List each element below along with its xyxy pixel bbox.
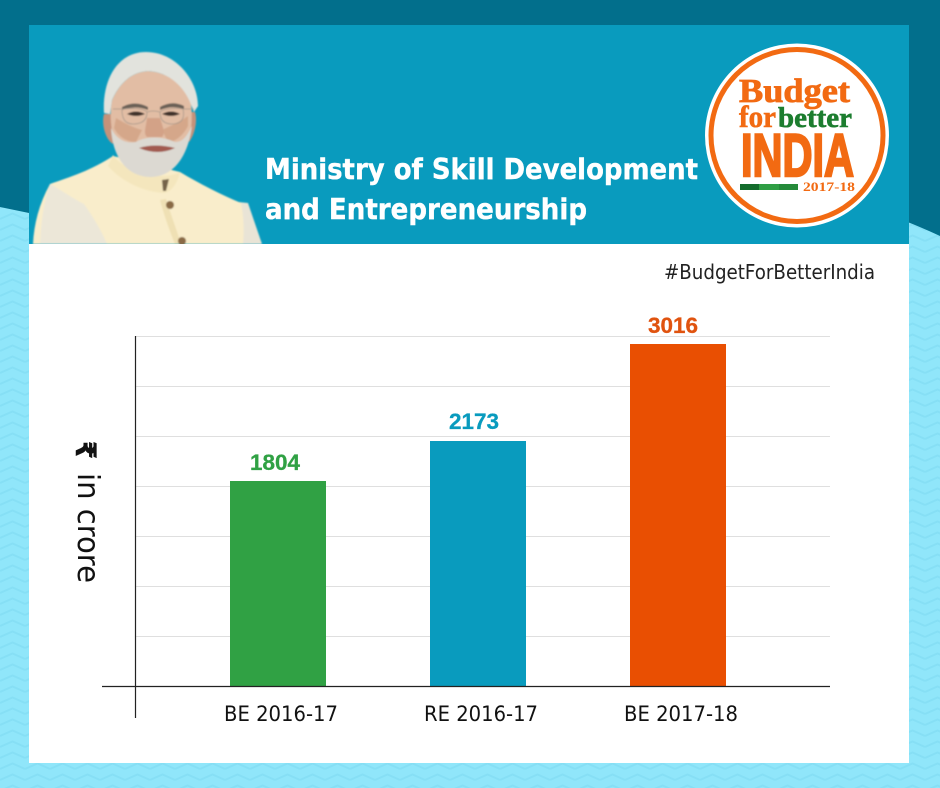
heading: Ministry of Skill Development <box>265 153 698 186</box>
portrait: white beard <box>111 126 192 177</box>
category: BE 2017-18: BE 2017-18 <box>624 702 738 726</box>
header banner <box>29 25 909 244</box>
portrait: ears <box>103 112 196 144</box>
portrait: right sleeve <box>238 202 262 244</box>
axes <box>102 336 830 718</box>
logo badge: Budget for better India <box>705 44 889 228</box>
hashtag: #BudgetForBetterIndia <box>664 260 875 284</box>
portrait: vest buttons <box>166 201 186 245</box>
heading <box>265 153 698 226</box>
background: dark teal top band <box>0 0 940 236</box>
logo: Budget: Budget <box>739 73 851 110</box>
portrait illustration <box>33 52 262 245</box>
gridlines <box>135 336 830 636</box>
portrait: cream vest <box>33 156 244 244</box>
portrait: eyebrows <box>122 103 184 110</box>
portrait: vest centre seam <box>160 199 181 244</box>
value: 3016: 3016 <box>648 313 698 338</box>
portrait: mouth <box>139 146 175 152</box>
logo: year: 2017-18 <box>803 179 856 194</box>
logo: green bar <box>740 184 798 190</box>
value: 1804: 1804 <box>250 450 300 475</box>
y axis title: rupee symbol: ₹ <box>69 441 102 459</box>
portrait: cheek shading <box>114 116 188 142</box>
bar chart <box>69 313 830 726</box>
bar: BE 2017-18 <box>630 344 726 686</box>
category: RE 2016-17: RE 2016-17 <box>424 702 538 726</box>
heading: and Entrepreneurship <box>265 193 587 226</box>
logo: better: better <box>778 102 852 134</box>
logo: circle <box>705 44 889 228</box>
portrait: collar opening <box>162 179 169 191</box>
portrait: face <box>110 70 193 144</box>
bar: RE 2016-17 <box>430 441 526 686</box>
portrait: eyes <box>127 112 180 116</box>
portrait: white hair <box>104 52 198 114</box>
portrait: nose shadow <box>145 118 164 137</box>
portrait: left sleeve <box>40 184 107 244</box>
white content panel <box>29 244 909 763</box>
logo: for: for <box>739 99 776 134</box>
logo: INDIA: INDIA <box>741 122 854 189</box>
category: BE 2016-17: BE 2016-17 <box>224 702 338 726</box>
portrait: collar <box>108 155 180 193</box>
y axis title <box>69 441 105 583</box>
logo: orange ring <box>711 50 883 222</box>
y axis title: unit: in crore <box>70 473 105 583</box>
bar: BE 2016-17 <box>230 481 326 686</box>
value: 2173: 2173 <box>449 409 499 434</box>
portrait: glasses <box>113 108 194 124</box>
